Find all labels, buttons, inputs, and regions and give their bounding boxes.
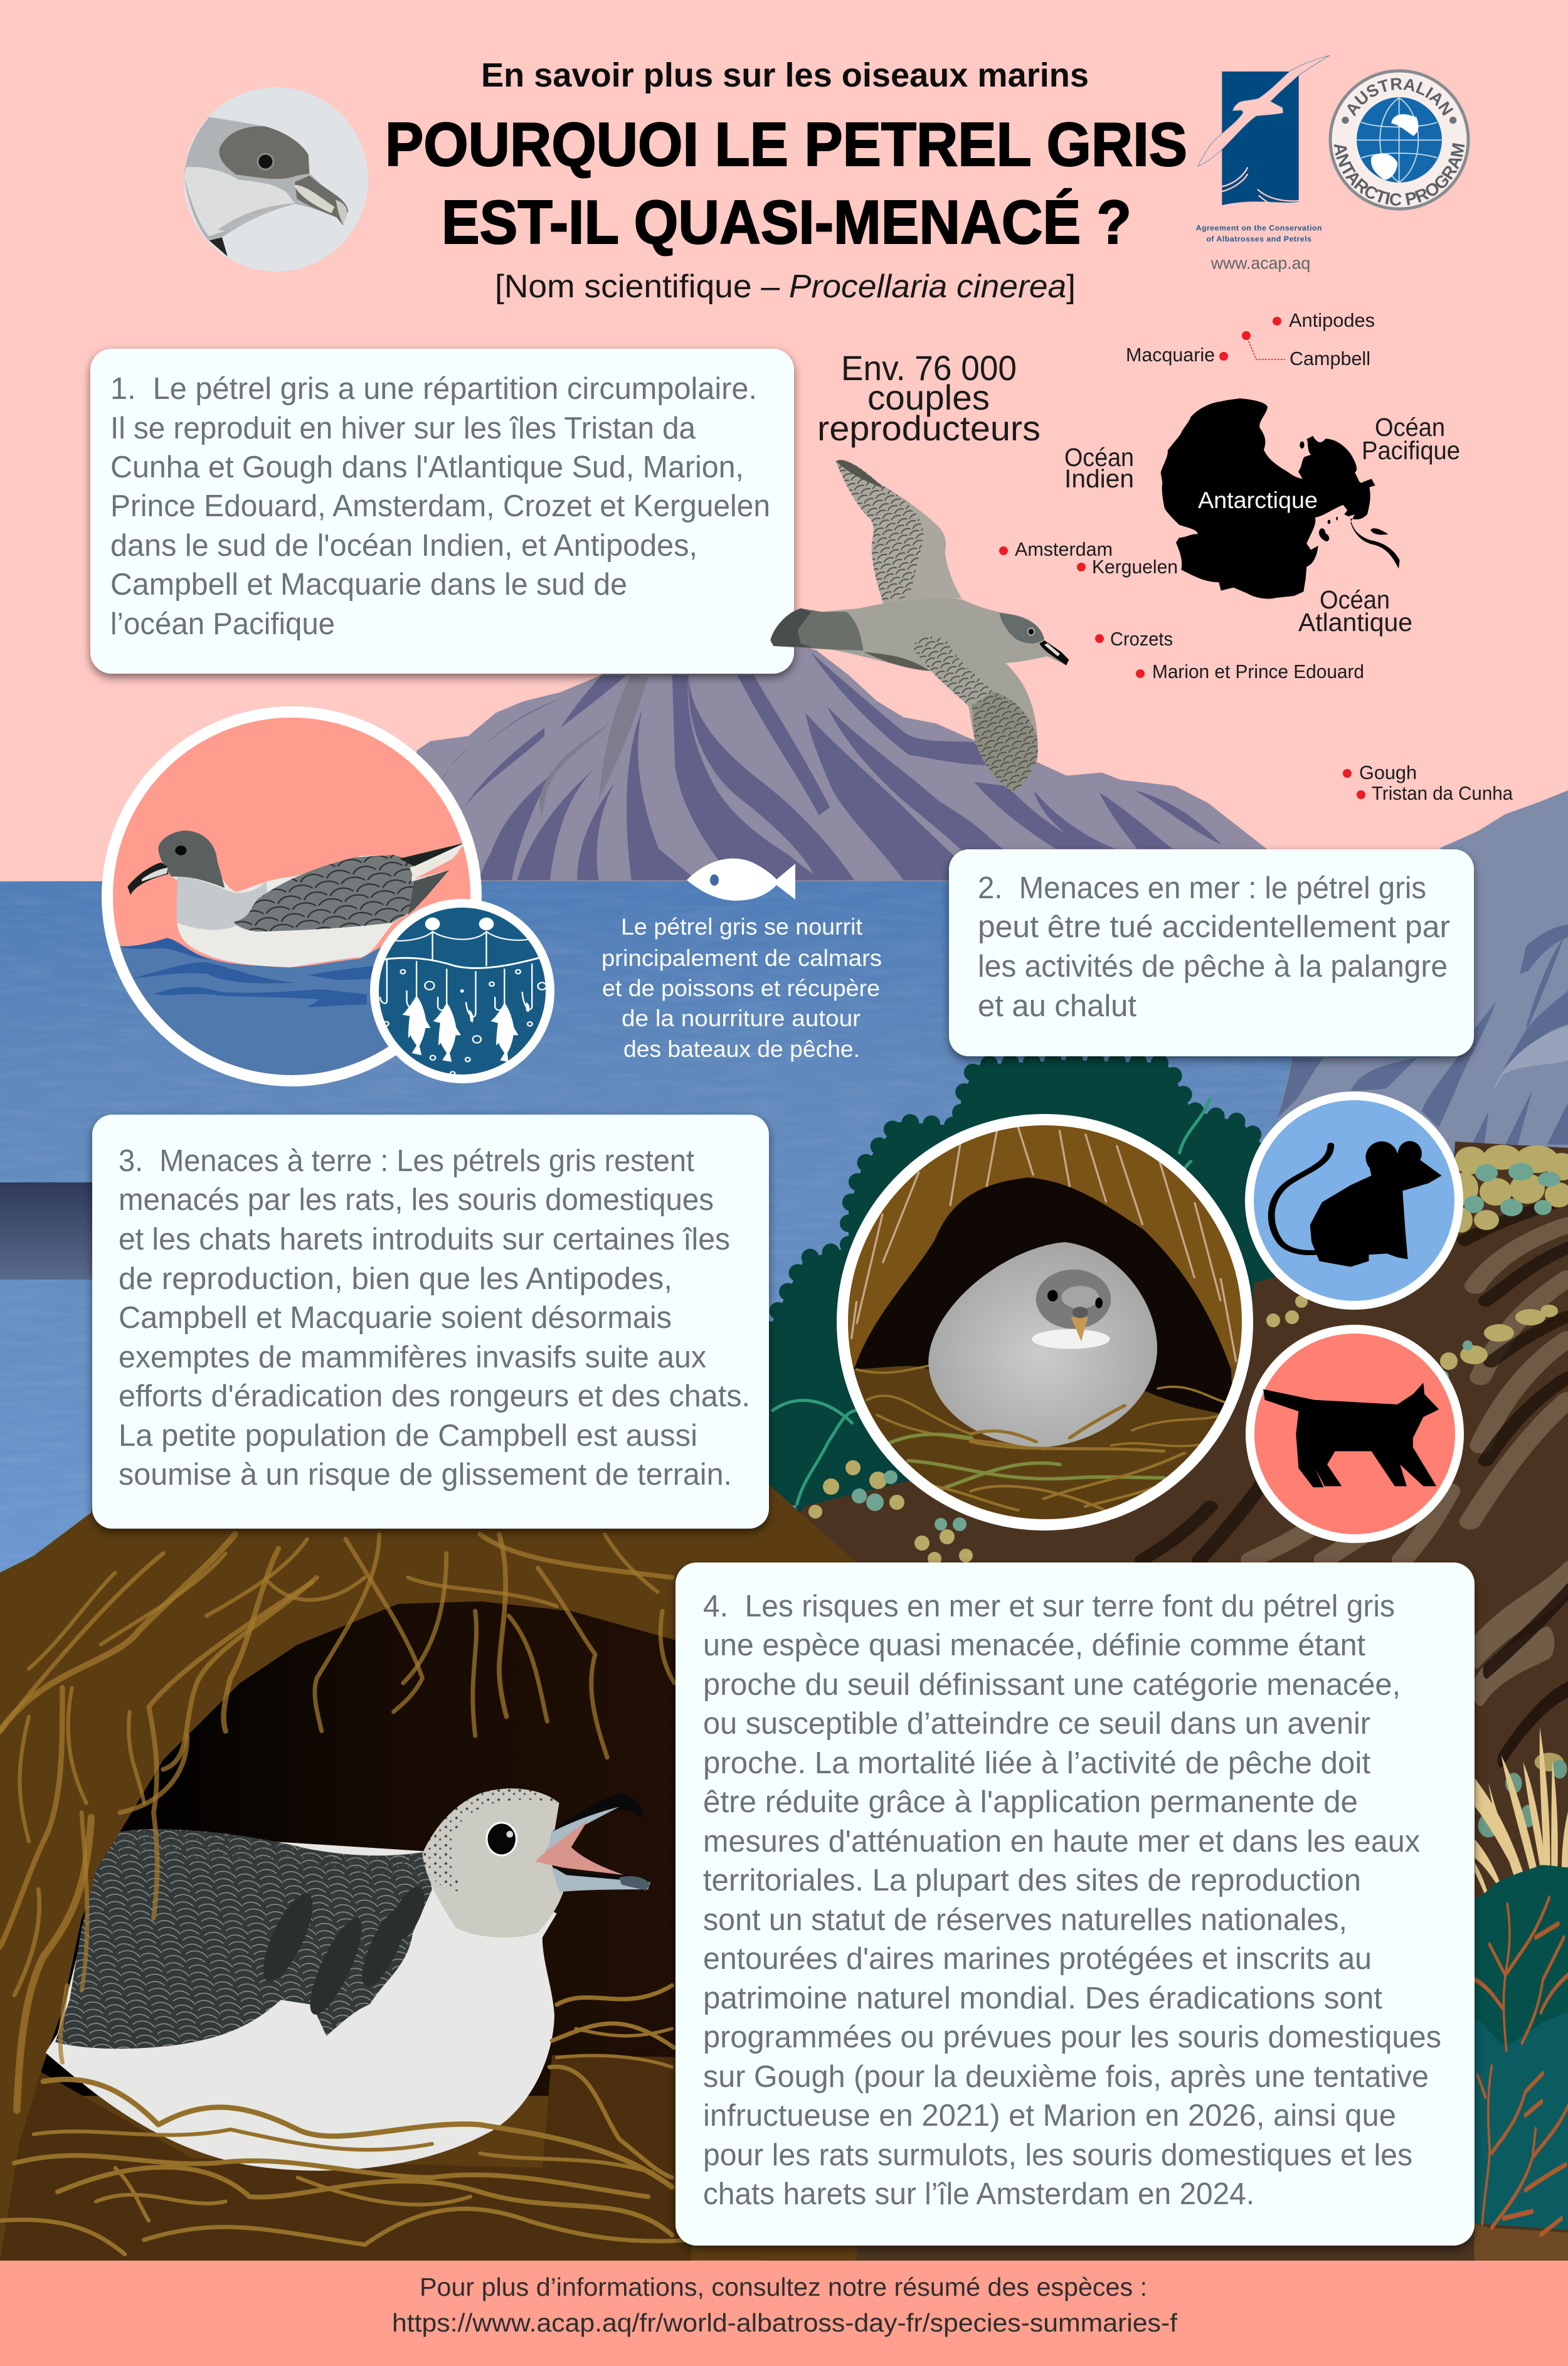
text: conservation status: territoriales. La plupart des sites de reproduction [703,1864,1361,1897]
roots and nest strands [0,1534,691,2254]
icon circle: rodent threat [1249,1096,1459,1305]
text: conservation status: une espèce quasi menacée, définie comme étant [703,1628,1365,1662]
logo: Australian Antarctic Program: AUSTRALIAN [1347,78,1454,117]
logo: ACAP: of Albatrosses and Petrels [1206,235,1311,243]
footer band [0,2261,1568,2366]
lower shrub [1475,2012,1568,2230]
footer text: https://www.acap.aq/fr/world-albatross-day-fr/species-summaries-f [392,2308,1178,2337]
text: conservation status: infructueuse en 2021) et Marion en 2026, ainsi que [703,2099,1396,2133]
heading: main title [385,110,1187,257]
right-hand vegetation [1475,1727,1568,2265]
map labels: breeding islands: Kerguelen [1092,556,1178,578]
map labels: oceans: Pacifique [1362,436,1460,465]
text: conservation status: proche du seuil définissant une catégorie menacée, [703,1668,1401,1702]
map labels: breeding islands [999,309,1513,804]
map labels: breeding islands: Amsterdam [1015,538,1113,560]
text: threats on land: La petite population de Campbell est aussi [119,1419,697,1453]
map labels: breeding islands: Tristan da Cunha [1372,782,1513,804]
text: conservation status: mesures d'atténuation en haute mer et dans les eaux [703,1825,1420,1859]
feeding text: Le pétrel gris se nourrit [621,914,863,940]
heading: kicker: En savoir plus sur les oiseaux marins [481,56,1089,94]
upper shrub [1475,1865,1568,2055]
lichen clusters [808,1145,1568,1566]
text: conservation status: patrimoine naturel mondial. Des éradications sont [703,1981,1382,2015]
text: conservation status: ou susceptible d’atteindre ce seuil dans un avenir [703,1707,1370,1741]
text: conservation status: 4. Les risques en mer et sur terre font du pétrel gris [703,1589,1395,1623]
text: threats on land: et les chats harets introduits sur certaines îles [119,1223,730,1256]
burrow with nesting petrel [0,1477,857,2261]
map labels: breeding islands: Marion et Prince Edouard [1152,660,1364,682]
map labels: breeding islands: Campbell [1290,347,1370,369]
distant land band [0,1182,94,1280]
map labels: breeding islands: Antipodes [1289,309,1375,331]
footer text: Pour plus d’informations, consultez notre résumé des espèces : [420,2273,1147,2301]
burrow petrel [928,1242,1157,1448]
dried grass [1475,1727,1568,1896]
feeding text: de la nourriture autour [622,1005,861,1031]
text: conservation status [703,1589,1441,2211]
head and beak [999,613,1044,644]
map: Antarctica silhouette [1161,398,1400,599]
text: circumpolar range: dans le sud de l'océan Indien, et Antipodes, [110,529,697,563]
panel 3: threats on land [92,1115,769,1529]
text: conservation status: entourées d'aires marines protégées et inscrits au [703,1942,1372,1976]
text: threats on land: efforts d'éradication des rongeurs et des chats. [119,1379,750,1413]
map labels: oceans: Atlantique [1298,608,1412,637]
map labels: oceans: Océan [1064,443,1134,472]
upper wing [836,460,961,604]
map labels: breeding islands: Crozets [1110,628,1173,650]
text: conservation status: sont un statut de réserves naturelles nationales, [703,1903,1347,1937]
text: threats on land: de reproduction, bien que les Antipodes, [119,1262,672,1296]
population figure [817,348,1041,448]
text: circumpolar range: 1. Le pétrel gris a une répartition circumpolaire. [110,372,757,406]
logo: ACAP [1196,55,1330,272]
population figure: reproducteurs [817,408,1041,448]
text: threats at sea: 2. Menaces en mer : le pétrel gris [978,871,1426,905]
icon circle: fishing gear [374,903,550,1079]
map labels: oceans: Indien [1064,464,1134,493]
text: conservation status: sur Gough (pour la deuxième fois, après une tentative [703,2060,1429,2094]
icon: cat silhouette [1263,1382,1439,1487]
illustration circle: petrel in burrow [836,1111,1252,1533]
right mountain [1275,790,1568,1150]
lichen behind grass [1478,1753,1567,1837]
panel 1: distribution [90,349,794,674]
map labels: breeding islands: Gough [1359,761,1417,783]
map labels: breeding islands: Macquarie [1126,344,1215,366]
map labels: oceans [1064,413,1460,637]
green bushes [768,1060,1277,1505]
text: threats on land: exemptes de mammifères invasifs suite aux [119,1340,706,1374]
map labels: oceans: Océan [1375,413,1445,442]
map labels: oceans: Océan [1320,585,1390,614]
text: circumpolar range: Il se reproduit en hiver sur les îles Tristan da [110,411,696,445]
illustration circle: petrel on water [107,712,485,1086]
sea [0,881,1568,1590]
heading: main title: EST-IL QUASI-MENACÉ ? [442,188,1131,257]
feeding text: et de poissons et récupère [602,975,880,1001]
feeding text: des bateaux de pêche. [623,1036,860,1062]
logo: ACAP: www.acap.aq [1210,253,1310,272]
map: Antarctica silhouette: Antarctique [1198,487,1318,513]
flying petrel [770,460,1069,792]
earth bank [765,1142,1568,2261]
text: threats at sea: et au chalut [978,989,1136,1023]
text: threats on land: soumise à un risque de glissement de terrain. [119,1458,732,1492]
feeding text [601,914,882,1062]
population figure: couples [867,378,990,417]
text: threats on land: menacés par les rats, les souris domestiques [119,1183,714,1217]
logo: Australian Antarctic Program: ANTARCTIC PROGRAM [1333,143,1465,206]
text: conservation status: proche. La mortalité liée à l’activité de pêche doit [703,1746,1370,1780]
text: conservation status: chats harets sur l’île Amsterdam en 2024. [703,2177,1254,2211]
text: threats at sea: les activités de pêche à la palangre [978,950,1448,984]
swimming petrel [127,830,465,967]
icon circle: cat threat [1250,1329,1459,1539]
heading: main title: POURQUOI LE PETREL GRIS [385,110,1187,179]
text: circumpolar range: l’océan Pacifique [110,607,335,641]
panel 4: conservation status [675,1562,1475,2246]
body [770,598,1069,671]
lower wing [911,633,1037,792]
base soil [1475,2223,1568,2265]
text: conservation status: être réduite grâce à l'application permanente de [703,1785,1358,1819]
text: threats on land: 3. Menaces à terre : Les pétrels gris restent [119,1144,694,1178]
heading: scientific name: [Nom scientifique – Procellaria cinerea] [495,268,1076,305]
nesting petrel [46,1788,650,2171]
logo: Australian Antarctic Program [1328,69,1470,211]
feeding text: principalement de calmars [601,945,882,971]
footer text [392,2273,1178,2337]
text: circumpolar range [110,372,770,641]
text: circumpolar range: Cunha et Gough dans l'Atlantique Sud, Marion, [110,450,744,484]
text: threats on land [119,1144,750,1492]
text: circumpolar range: Campbell et Macquarie dans le sud de [110,568,627,602]
text: threats on land: Campbell et Macquarie soient désormais [119,1301,672,1335]
volcano [416,644,1266,881]
panel 2: threats at sea [949,849,1474,1056]
portrait circle: petrel head [184,87,368,272]
red branches [1475,1898,1568,2235]
logo: ACAP: Agreement on the Conservation [1196,223,1322,232]
icon: mouse silhouette [1271,1141,1441,1267]
text: threats at sea: peut être tué accidentellement par [978,910,1450,944]
text: threats at sea [978,871,1450,1023]
text: conservation status: pour les rats surmulots, les souris domestiques et les [703,2138,1412,2172]
population figure: Env. 76 000 [841,348,1017,388]
text: conservation status: programmées ou prévues pour les souris domestiques [703,2020,1441,2054]
text: circumpolar range: Prince Edouard, Amsterdam, Crozet et Kerguelen [110,489,770,523]
icon: fish [687,859,795,901]
